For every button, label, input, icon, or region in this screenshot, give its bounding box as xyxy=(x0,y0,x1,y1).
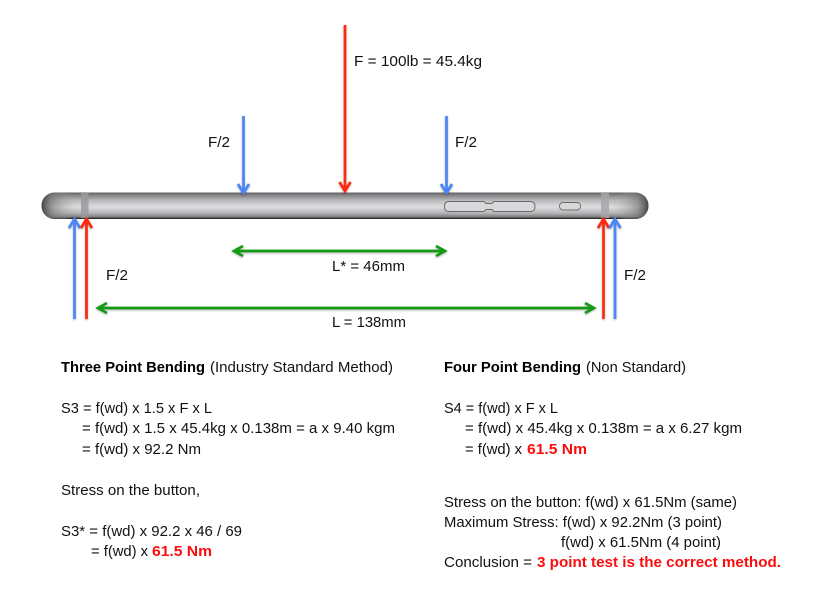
formula: S4: 61.5 Nm xyxy=(527,441,587,458)
formula: S3: = f(wd) x 92.2 Nm xyxy=(82,441,201,458)
formula: S3: = f(wd) x 1.5 x 45.4kg x 0.138m = a x 9.40 kgm xyxy=(82,420,395,437)
text: stress comparison xyxy=(444,494,737,551)
label: L* length: L* = 46mm xyxy=(332,258,405,275)
formula: S4 xyxy=(444,400,742,458)
formula: S3 xyxy=(61,400,395,458)
formula: S4: = f(wd) x xyxy=(465,441,522,458)
panel: three point bending xyxy=(61,359,395,560)
heading: four point bending xyxy=(444,359,686,376)
label: F/2 lower left: F/2 xyxy=(106,267,128,284)
volume buttons xyxy=(444,202,535,212)
small switch button xyxy=(560,202,580,210)
callout: conclusion: 3 point test is the correct method. xyxy=(537,554,781,571)
arrow: L* span xyxy=(234,246,445,256)
heading: four point bending: (Non Standard) xyxy=(586,359,686,376)
arrow: central red force xyxy=(340,25,350,191)
heading: three point bending xyxy=(61,359,393,376)
arrow: top left blue force xyxy=(238,116,249,193)
phone side view xyxy=(42,192,648,219)
arrow: top right blue force xyxy=(441,116,452,193)
panel: four point bending xyxy=(444,359,781,571)
label: F/2 lower right: F/2 xyxy=(624,267,646,284)
formula: S4: S4 = f(wd) x F x L xyxy=(444,400,558,417)
label: L length: L = 138mm xyxy=(332,314,406,331)
formula: S3*: S3* = f(wd) x 92.2 x 46 / 69 xyxy=(61,523,242,540)
arrow: lower left red support xyxy=(81,219,92,319)
heading: four point bending: Four Point Bending xyxy=(444,359,581,376)
heading: three point bending: (Industry Standard Method) xyxy=(210,359,393,376)
arrow: lower left blue support xyxy=(69,219,80,319)
heading: three point bending: Three Point Bending xyxy=(61,359,205,376)
formula: S4: = f(wd) x 45.4kg x 0.138m = a x 6.27 kgm xyxy=(465,420,742,437)
arrow: L span xyxy=(98,303,594,313)
formula: S3*: = f(wd) x xyxy=(91,543,148,560)
arrow: lower right red support xyxy=(598,219,609,319)
label: F/2 top left: F/2 xyxy=(208,134,230,151)
label: total force: F = 100lb = 45.4kg xyxy=(354,53,482,70)
formula: S3: S3 = f(wd) x 1.5 x F x L xyxy=(61,400,212,417)
text: stress comparison: f(wd) x 61.5Nm (4 point) xyxy=(561,534,721,551)
text: stress comparison: Stress on the button: f(wd) x 61.5Nm (same) xyxy=(444,494,737,511)
formula: S3* xyxy=(61,523,242,560)
callout: conclusion: Conclusion = xyxy=(444,554,532,571)
formula: S3*: 61.5 Nm xyxy=(152,543,212,560)
text: stress comparison: Maximum Stress: f(wd) x 92.2Nm (3 point) xyxy=(444,514,722,531)
label: F/2 top right: F/2 xyxy=(455,134,477,151)
text: stress on the button: Stress on the button, xyxy=(61,482,200,499)
arrow: lower right blue support xyxy=(610,219,620,319)
